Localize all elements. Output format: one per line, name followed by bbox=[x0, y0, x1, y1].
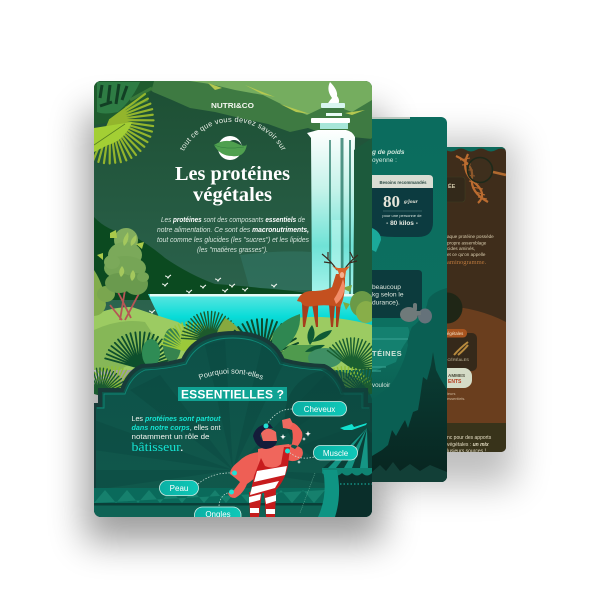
callout: Peau bbox=[160, 470, 237, 496]
callout: Peau: Peau bbox=[170, 484, 188, 493]
intro text: dans notre corps, elles ont bbox=[132, 425, 221, 432]
fist bbox=[282, 418, 293, 429]
callout: Cheveux: Cheveux bbox=[304, 405, 335, 414]
tree left bbox=[94, 228, 149, 320]
box: besoins recommandés: Besoins recommandés bbox=[379, 180, 427, 185]
arm right bbox=[284, 422, 303, 461]
icon: DNA helix bbox=[456, 154, 488, 203]
guy rope bbox=[300, 473, 315, 513]
pill: acides aminés: ENTS bbox=[448, 379, 462, 385]
chip: végétales: égétales bbox=[447, 331, 463, 336]
box: sportifs bbox=[372, 270, 422, 318]
box: besoins recommandés: pour une personne de bbox=[382, 213, 422, 218]
callout: Cheveux bbox=[264, 402, 346, 428]
arch panel bbox=[94, 333, 375, 517]
intro paragraph: notre alimentation. Ce sont des macronutriments, bbox=[157, 227, 309, 234]
box: sportifs: durance). bbox=[372, 300, 400, 306]
box: sportifs: beaucoup bbox=[372, 284, 401, 291]
top strip bbox=[372, 117, 410, 119]
birds bbox=[149, 275, 277, 313]
lights bbox=[340, 483, 372, 485]
explanation text: cides aminés, bbox=[447, 246, 475, 251]
conclusion text: végétales : un mix bbox=[447, 442, 489, 448]
foliage: top left bbox=[94, 81, 155, 165]
box: céréales: CÉRÉALES bbox=[447, 357, 469, 362]
foreground trees bbox=[372, 462, 447, 482]
icon: magnifier bbox=[468, 158, 506, 182]
waterfall bbox=[307, 130, 355, 296]
foliage: bottom band bbox=[74, 306, 391, 395]
arm left bbox=[228, 452, 262, 498]
land shade bbox=[94, 321, 160, 370]
intro text: oyenne : bbox=[372, 157, 397, 164]
intro text: notamment un rôle de bbox=[132, 434, 210, 441]
deer legs bbox=[302, 303, 341, 327]
callout: Ongles bbox=[194, 490, 241, 525]
tent body bbox=[335, 468, 372, 517]
title fragment: ÉE bbox=[448, 182, 456, 190]
small lines bbox=[372, 339, 408, 371]
panel: middle card, besoins bbox=[336, 117, 447, 482]
bottom olive band bbox=[501, 447, 506, 452]
box: besoins recommandés bbox=[372, 175, 433, 237]
roof scallops bbox=[322, 468, 372, 476]
tent bbox=[300, 423, 372, 517]
callout: Muscle: Muscle bbox=[323, 449, 349, 458]
right bush bbox=[342, 285, 376, 323]
box: céréales bbox=[447, 333, 477, 371]
box: besoins recommandés: - 80 kilos - bbox=[386, 220, 418, 227]
forest silhouette bbox=[372, 352, 447, 482]
title: végétales bbox=[193, 184, 272, 206]
dark title box bbox=[447, 177, 466, 202]
box: besoins recommandés: 80 bbox=[383, 192, 400, 211]
explanation text: aque protéine possède bbox=[447, 234, 494, 239]
deer bbox=[297, 252, 358, 327]
text fragment: vouloir bbox=[372, 382, 390, 389]
scalloped top edge bbox=[447, 147, 506, 152]
sunlit ridges bbox=[208, 83, 365, 115]
heading fragment: TÉINES bbox=[372, 349, 402, 358]
box: sportifs: kg selon le bbox=[372, 292, 404, 298]
title bbox=[175, 163, 290, 206]
logo: NUTRI&CO: NUTRI&CO bbox=[211, 101, 254, 110]
lake bbox=[148, 294, 372, 340]
conclusion text bbox=[447, 435, 492, 452]
torso bbox=[250, 444, 289, 494]
heading: essentielles: ESSENTIELLES ? bbox=[181, 388, 284, 402]
curved tagline: tout ce que vous devez savoir sur bbox=[180, 116, 286, 150]
intro text bbox=[132, 416, 221, 454]
land right bbox=[262, 317, 372, 370]
drop shadow bbox=[85, 112, 515, 542]
intro text: g de poids bbox=[371, 149, 405, 156]
background hill bbox=[372, 327, 409, 372]
dark circle bbox=[447, 292, 462, 324]
explanation text: et ce qu'on appelle bbox=[447, 252, 486, 257]
conclusion text: lusieurs sources ! bbox=[447, 448, 486, 454]
legs bbox=[249, 488, 276, 517]
tent roof bbox=[323, 428, 372, 468]
heading: pourquoi sont-elles: Pourquoi sont-elles bbox=[198, 368, 264, 380]
ground band bbox=[94, 488, 372, 518]
flag bbox=[340, 423, 367, 430]
intro paragraph: tout comme les glucides (les "sucres") et les lipides bbox=[157, 237, 309, 244]
deer body bbox=[297, 274, 345, 307]
antlers bbox=[322, 252, 358, 270]
intro text: bâtisseur. bbox=[132, 439, 184, 454]
mountain right of waterfall bbox=[354, 138, 372, 294]
panel: back card, acides aminés bbox=[447, 147, 506, 452]
translucent shape bbox=[240, 251, 312, 290]
note text: essentiels. bbox=[447, 396, 465, 401]
sunburst rays bbox=[94, 340, 372, 490]
mountains: mid green bbox=[151, 81, 372, 139]
teal figure bbox=[372, 228, 381, 252]
mountains: light green bbox=[190, 81, 372, 115]
land left bbox=[94, 307, 230, 370]
intro text: Les protéines sont partout bbox=[132, 416, 221, 423]
panel: front card bbox=[94, 81, 372, 517]
chip: végétales bbox=[447, 329, 467, 338]
hair and beard bbox=[253, 424, 277, 449]
pill: acides aminés bbox=[447, 368, 472, 388]
note text bbox=[447, 392, 465, 400]
intro paragraph: Les protéines sont des composants essentiels de bbox=[161, 217, 305, 224]
decorative big circle bbox=[285, 370, 375, 460]
singlet stripes bbox=[250, 466, 287, 495]
strongman bbox=[228, 418, 311, 517]
intro paragraph: (les "matières grasses"). bbox=[197, 247, 268, 254]
note text: ieurs bbox=[447, 391, 455, 396]
face bbox=[260, 428, 277, 441]
roof stripes bbox=[328, 428, 368, 468]
intro text bbox=[372, 150, 404, 164]
sparkles bbox=[280, 431, 311, 464]
darker hill upper right bbox=[372, 288, 447, 482]
brown hill background bbox=[447, 308, 506, 423]
callout: Muscle bbox=[285, 446, 358, 460]
intro paragraph bbox=[157, 217, 309, 254]
deer head bbox=[332, 266, 350, 278]
deer chest bbox=[334, 279, 345, 304]
conclusion text: nc pour des apports bbox=[447, 435, 492, 441]
pill: acides aminés: AMMES bbox=[448, 373, 465, 378]
icon: dumbbell bbox=[400, 303, 432, 324]
title: Les protéines bbox=[175, 163, 290, 185]
explanation text: propre assemblage bbox=[447, 240, 487, 246]
icon: leaf logo bbox=[214, 136, 247, 160]
curtain bbox=[318, 470, 339, 517]
explanation text: aminogramme. bbox=[447, 259, 487, 266]
singlet bbox=[250, 447, 290, 496]
callout: Ongles: Ongles bbox=[205, 510, 231, 519]
waterfall tower bbox=[311, 82, 350, 129]
explanation text bbox=[447, 234, 494, 266]
box: besoins recommandés: g/jour bbox=[403, 199, 419, 205]
lake highlight bbox=[150, 294, 355, 296]
dark hill left bbox=[94, 217, 312, 300]
